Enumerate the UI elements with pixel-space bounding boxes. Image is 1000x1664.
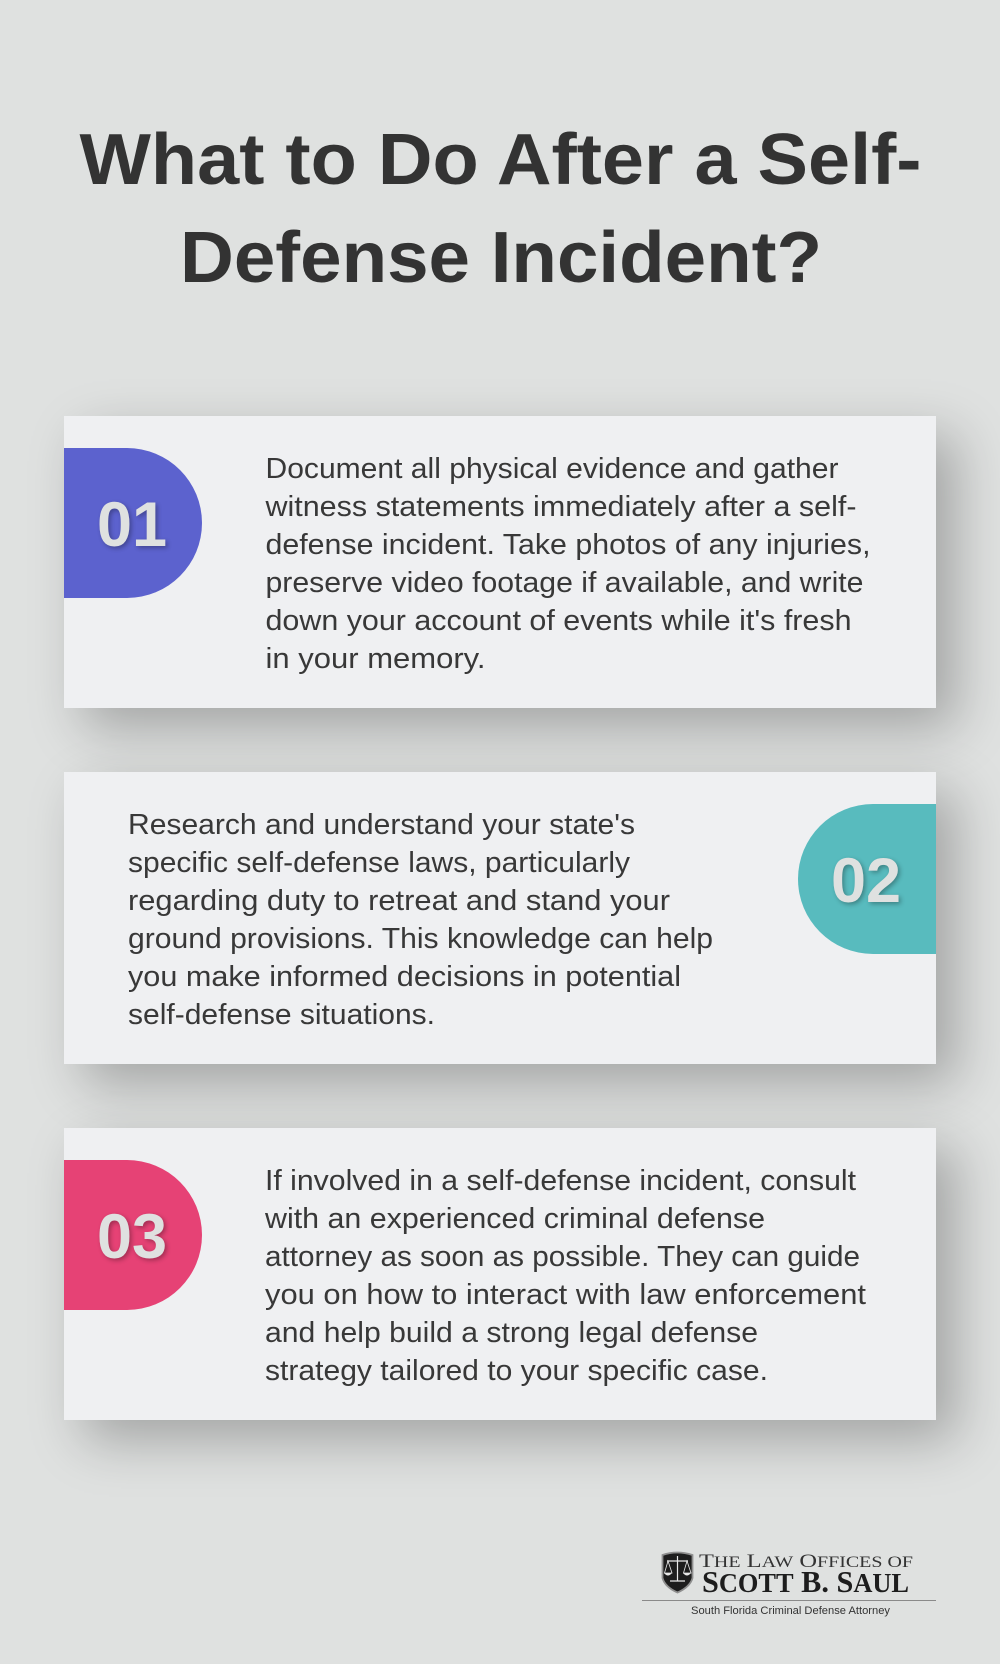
text block: step 01: defense incident. Take photos of any injuries, [266, 529, 870, 561]
text block: step 03: If involved in a self-defense incident, consult [265, 1165, 856, 1197]
title [80, 120, 922, 298]
text block: step 01: in your memory. [266, 643, 486, 675]
icon: shield with scales [662, 1552, 692, 1592]
text block: step 02: ground provisions. This knowledge can help [128, 923, 713, 955]
badge: 01 [64, 448, 202, 598]
title: Defense Incident? [180, 218, 822, 298]
text block: step 01: Document all physical evidence and gather [266, 453, 839, 485]
text block: step 03: you on how to interact with law enforcement [265, 1279, 866, 1311]
text block: step 03: attorney as soon as possible. They can guide [265, 1241, 860, 1273]
badge: 02 [798, 804, 936, 954]
logo text: firm name line 2: SCOTT B. SAUL [702, 1564, 909, 1599]
text block: step 01: preserve video footage if available, and write [266, 567, 864, 599]
text block: step 02 [128, 809, 713, 1031]
badge: 01: 01 [97, 490, 167, 560]
badge: 03 [64, 1160, 202, 1310]
badge: 02: 02 [831, 846, 901, 916]
text block: step 02: Research and understand your state's [128, 809, 635, 841]
logo text: tagline: South Florida Criminal Defense Attorney [691, 1605, 891, 1617]
text block: step 01: witness statements immediately after a self- [264, 491, 856, 523]
text block: step 02: self-defense situations. [128, 999, 435, 1031]
text block: step 02: specific self-defense laws, particularly [128, 847, 631, 879]
text block: step 03: strategy tailored to your specific case. [265, 1355, 768, 1387]
logo text: firm name line 1: THE L AW O FFICES OF [699, 1551, 913, 1572]
panel: step 01 [64, 416, 936, 708]
panel: step 03 [64, 1128, 936, 1420]
logo: The Law Offices of Scott B. Saul [642, 1551, 936, 1617]
panel: step 02 [64, 772, 936, 1064]
badge: 03: 03 [97, 1202, 167, 1272]
text block: step 03: with an experienced criminal defense [264, 1203, 765, 1235]
title: What to Do After a Self- [80, 120, 922, 200]
text block: step 02: you make informed decisions in potential [128, 961, 681, 993]
text block: step 01 [264, 453, 870, 675]
text block: step 02: regarding duty to retreat and stand your [128, 885, 671, 917]
text block: step 03 [264, 1165, 866, 1387]
text block: step 01: down your account of events while it's fresh [266, 605, 852, 637]
text block: step 03: and help build a strong legal defense [265, 1317, 758, 1349]
